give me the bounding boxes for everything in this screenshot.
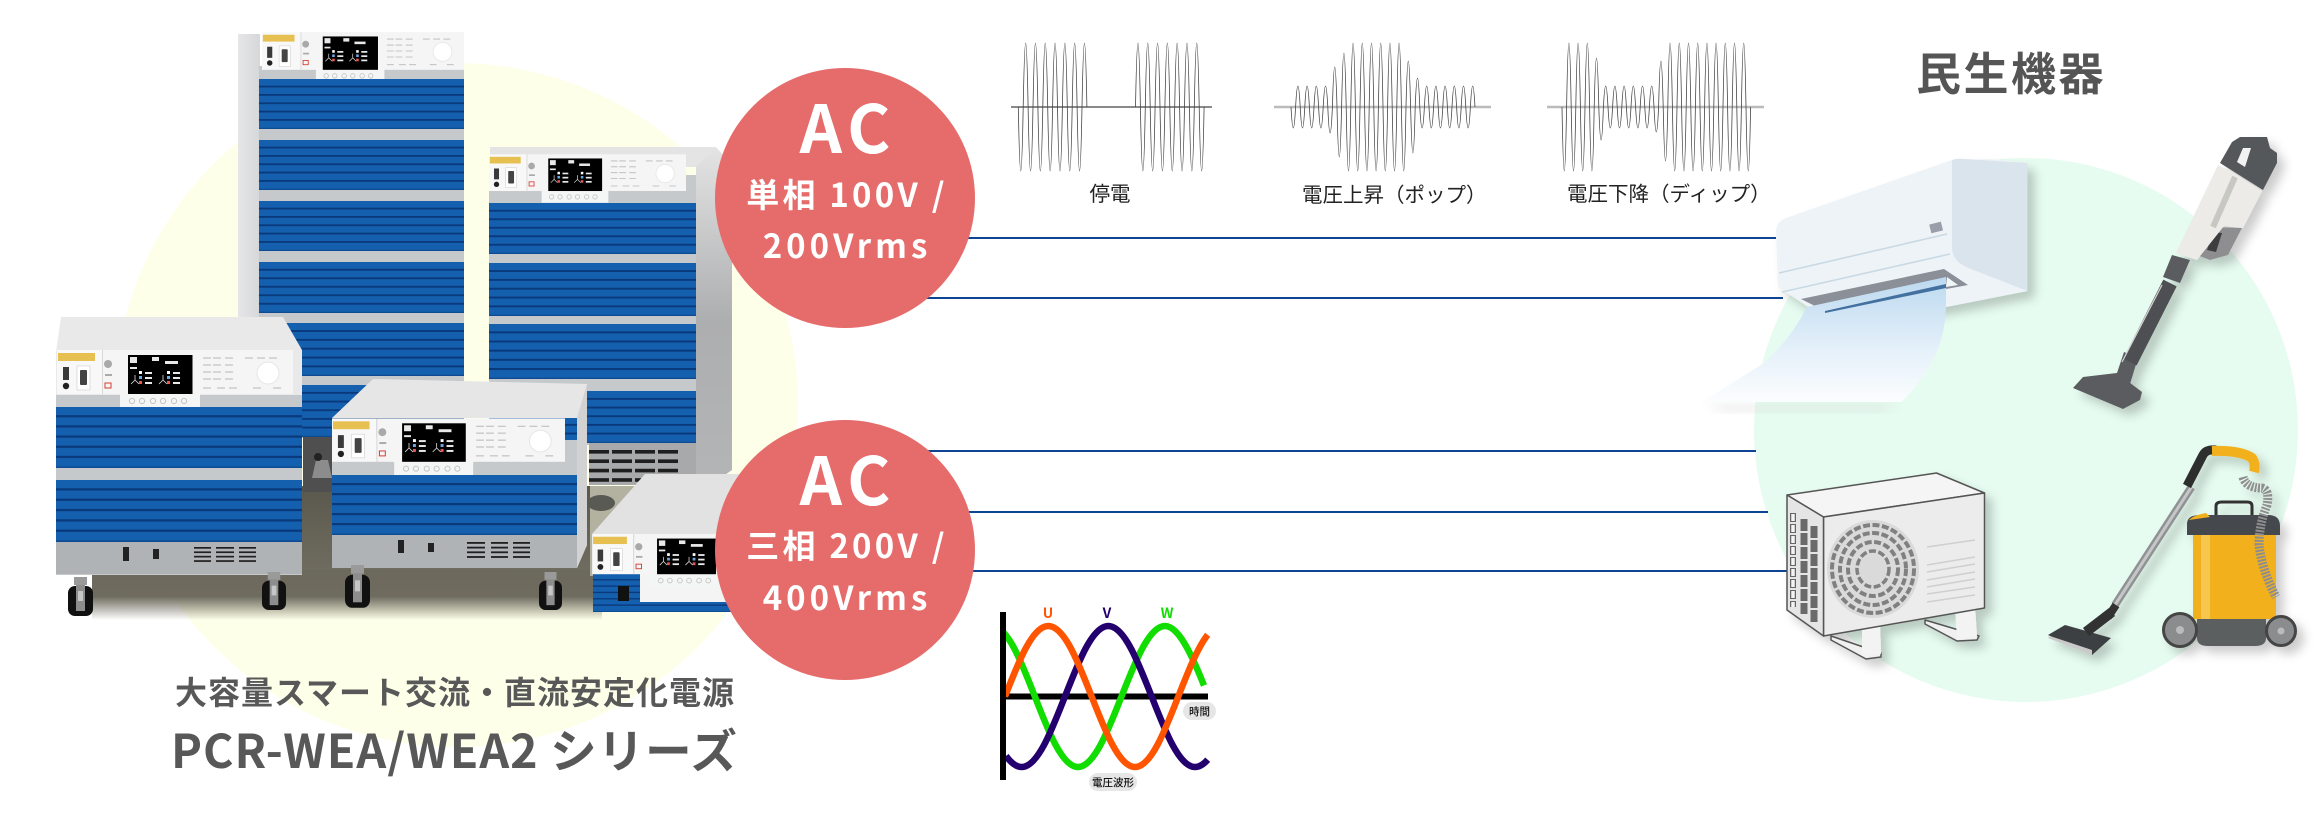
floor shadow	[92, 486, 650, 620]
label: AC: AC	[799, 77, 896, 173]
label: AC: AC	[799, 429, 896, 525]
caption: outage: 停電	[1090, 177, 1130, 207]
icon: stick vacuum cleaner	[2073, 137, 2277, 409]
subtitle: product category: 大容量スマート交流・直流安定化電源	[175, 668, 735, 714]
blue connection lines	[920, 238, 1795, 571]
label V: V	[1102, 603, 1112, 623]
label: voltage line two: 200Vrms	[763, 220, 931, 268]
label: voltage line two: 400Vrms	[763, 572, 931, 620]
unit: small benchtop	[592, 474, 808, 612]
label: single phase voltage: 単相 100V /	[746, 169, 948, 217]
icon: outdoor AC unit	[1787, 473, 1984, 659]
tag: time	[1183, 702, 1216, 720]
waveform: voltage dip	[1547, 43, 1771, 207]
wave V	[1006, 626, 1208, 767]
wave W	[992, 626, 1204, 767]
waveform: voltage pop	[1274, 43, 1491, 208]
tag: voltage waveform: 電圧波形	[1092, 775, 1134, 790]
label W: W	[1161, 603, 1174, 623]
circle: three phase AC	[715, 420, 975, 680]
unit: tall rack	[238, 32, 464, 492]
icon: air conditioner indoor unit	[1702, 159, 2028, 412]
caption: voltage dip: 電圧下降（ディップ）	[1567, 177, 1771, 207]
label: three phase voltage: 三相 200V /	[746, 520, 948, 568]
series name: PCR-WEA/WEA2 シリーズ	[171, 715, 738, 782]
unit: medium rack	[489, 147, 732, 511]
unit: front left	[56, 317, 302, 616]
waveform: outage	[1011, 43, 1212, 207]
background circle: pale yellow	[114, 63, 798, 747]
label U: U	[1043, 603, 1053, 623]
time axis	[1003, 694, 1208, 700]
heading: consumer appliances: 民生機器	[1916, 38, 2106, 103]
voltage axis	[1000, 612, 1006, 780]
caption: voltage pop: 電圧上昇（ポップ）	[1302, 178, 1486, 208]
unit: front centre	[332, 379, 587, 610]
wave U	[1005, 626, 1208, 767]
icon: canister vacuum cleaner	[2048, 450, 2296, 655]
background circle: pale green	[1754, 158, 2298, 702]
product title	[171, 668, 738, 782]
tag: time: 時間	[1189, 704, 1210, 719]
three phase chart	[992, 603, 1216, 791]
product photo: PCR-WEA power supplies	[56, 32, 808, 620]
circle: single phase AC	[715, 68, 975, 328]
